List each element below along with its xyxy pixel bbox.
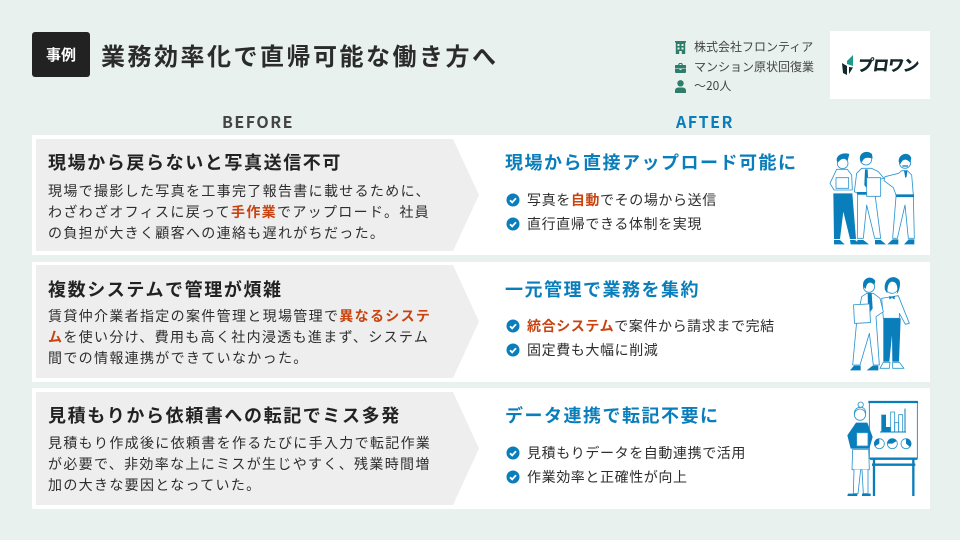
before text 2: 賃貸仲介業者指定の案件管理と現場管理で異なるシステ xyxy=(48,306,431,326)
after bullet 3-2: 作業効率と正確性が向上 xyxy=(527,467,688,487)
before text 1 xyxy=(48,181,431,243)
after bullet 1-1: 写真を自動でその場から送信 xyxy=(527,190,717,210)
before arrow 2 xyxy=(36,265,479,378)
company info: employees xyxy=(675,77,731,94)
logo panel xyxy=(830,31,930,99)
illustration: man and woman xyxy=(850,277,910,370)
before heading 2: 複数システムで管理が煩雑 xyxy=(48,276,283,302)
before text 1: の負担が大きく顧客への連絡も遅れがちだった。 xyxy=(48,223,385,243)
company info: industry: マンション原状回復業 xyxy=(694,58,814,75)
after heading 3: データ連携で転記不要に xyxy=(505,402,720,428)
before text 3: 加の大きな要因となっていた。 xyxy=(48,475,262,495)
after bullet 3-1: 見積もりデータを自動連携で活用 xyxy=(527,443,746,463)
before heading 1: 現場から戻らないと写真送信不可 xyxy=(48,149,342,175)
after bullet 2-1: 統合システムで案件から請求まで完結 xyxy=(527,316,775,336)
badge: case study xyxy=(32,32,90,77)
before text 1: 現場で撮影した写真を工事完了報告書に載せるために、 xyxy=(48,181,431,201)
before text 2: ムを使い分け、費用も高く社内浸透も進まず、システム xyxy=(48,327,429,347)
panel: row 1 xyxy=(32,135,930,255)
before text 3 xyxy=(48,433,431,495)
logo mark xyxy=(842,55,853,75)
after bullet 1-2: 直行直帰できる体制を実現 xyxy=(527,214,702,234)
badge: case study: 事例 xyxy=(46,44,76,65)
illustration: three men xyxy=(830,152,915,244)
company info: employees: ～20人 xyxy=(694,77,731,94)
after heading 1: 現場から直接アップロード可能に xyxy=(505,149,798,175)
before text 2 xyxy=(48,306,431,368)
panel: row 3 xyxy=(32,388,930,509)
before arrow 1 xyxy=(36,139,479,251)
title: 業務効率化で直帰可能な働き方へ xyxy=(101,37,498,72)
before arrow 3 xyxy=(36,392,479,505)
before text 3: が必要で、非効率な上にミスが生じやすく、残業時間増 xyxy=(48,454,431,474)
logo wordmark: プロワン xyxy=(856,52,920,76)
column heading: before: BEFORE xyxy=(222,109,294,133)
before heading 3: 見積もりから依頼書への転記でミス多発 xyxy=(48,402,401,428)
before text 3: 見積もり作成後に依頼書を作るたびに手入力で転記作業 xyxy=(48,433,431,453)
before text 2: 間での情報連携ができていなかった。 xyxy=(48,348,309,368)
illustration: woman presenting chart xyxy=(847,400,918,496)
panel: row 2 xyxy=(32,262,930,382)
column heading: after: AFTER xyxy=(676,109,734,133)
after heading 2: 一元管理で業務を集約 xyxy=(505,276,700,302)
after bullet 2-2: 固定費も大幅に削減 xyxy=(527,340,658,360)
before text 1: わざわざオフィスに戻って手作業でアップロード。社員 xyxy=(48,202,430,222)
company info: name: 株式会社フロンティア xyxy=(694,38,813,55)
